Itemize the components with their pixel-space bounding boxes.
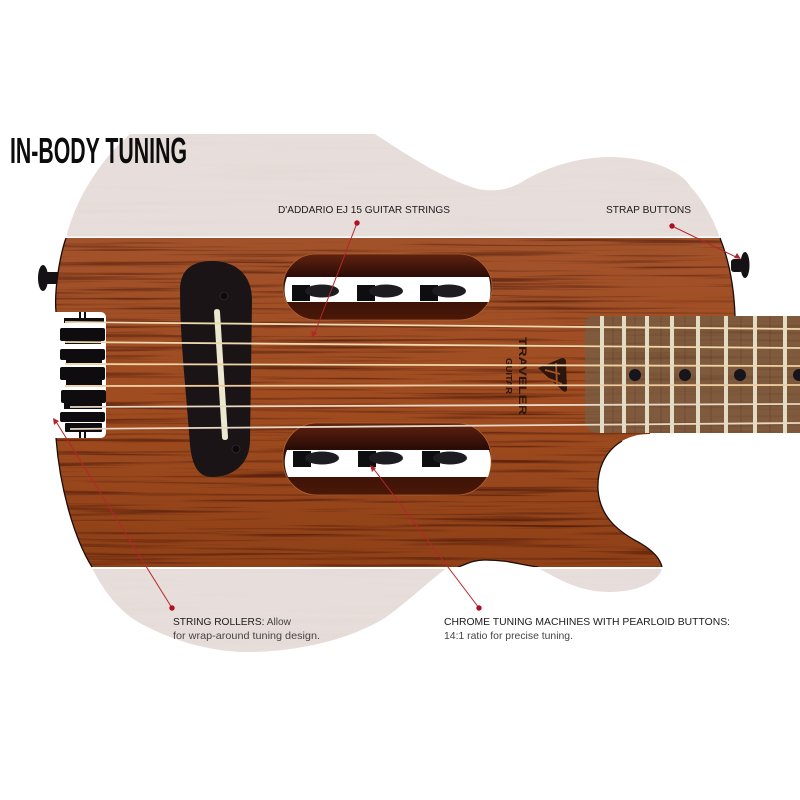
panel: lower tuner slot xyxy=(283,423,491,495)
callout: strings xyxy=(278,204,450,338)
callout: string rollers: for wrap-around tuning design. xyxy=(173,630,320,642)
icon: lower tuner 2 xyxy=(358,451,403,467)
icon: Traveler Guitar logo xyxy=(504,337,567,415)
icon: upper tuner 3 xyxy=(420,284,466,301)
icon: Traveler Guitar logo: TRAVELER xyxy=(516,337,528,415)
icon: left strap button xyxy=(38,265,60,291)
inlay dots xyxy=(629,369,800,381)
icon: right strap button xyxy=(731,252,750,278)
callout: chrome tuning machines xyxy=(370,465,730,642)
panel: upper tuner slot xyxy=(283,254,492,320)
strings xyxy=(65,322,800,429)
icon: saddle xyxy=(214,309,228,440)
panel: pale guitar body silhouette xyxy=(50,130,740,660)
icon: upper tuner 1 xyxy=(292,284,339,301)
title: IN-BODY TUNING xyxy=(10,130,187,171)
frets xyxy=(600,315,787,436)
icon: Traveler Guitar logo: GUITAR xyxy=(504,358,513,394)
callout: string rollers xyxy=(53,418,320,642)
callout: strap buttons: STRAP BUTTONS xyxy=(606,204,691,216)
icon: upper tuner 2 xyxy=(357,284,403,301)
callout: chrome tuning machines: 14:1 ratio for precise tuning. xyxy=(444,630,573,642)
icon: lower tuner 3 xyxy=(422,451,467,467)
panel: fretboard xyxy=(585,315,800,436)
icon: lower tuner 1 xyxy=(293,451,339,467)
callout: strap buttons xyxy=(606,204,741,259)
callout: strings: D'ADDARIO EJ 15 GUITAR STRINGS xyxy=(278,204,450,216)
callout: chrome tuning machines: CHROME TUNING MACHINES WITH PEARLOID BUTTONS: xyxy=(444,616,730,628)
icon: bridge xyxy=(180,261,252,477)
panel: wood body band xyxy=(50,236,740,571)
icon: string rollers xyxy=(60,312,106,438)
callout: string rollers: STRING ROLLERS: Allow xyxy=(173,616,291,628)
